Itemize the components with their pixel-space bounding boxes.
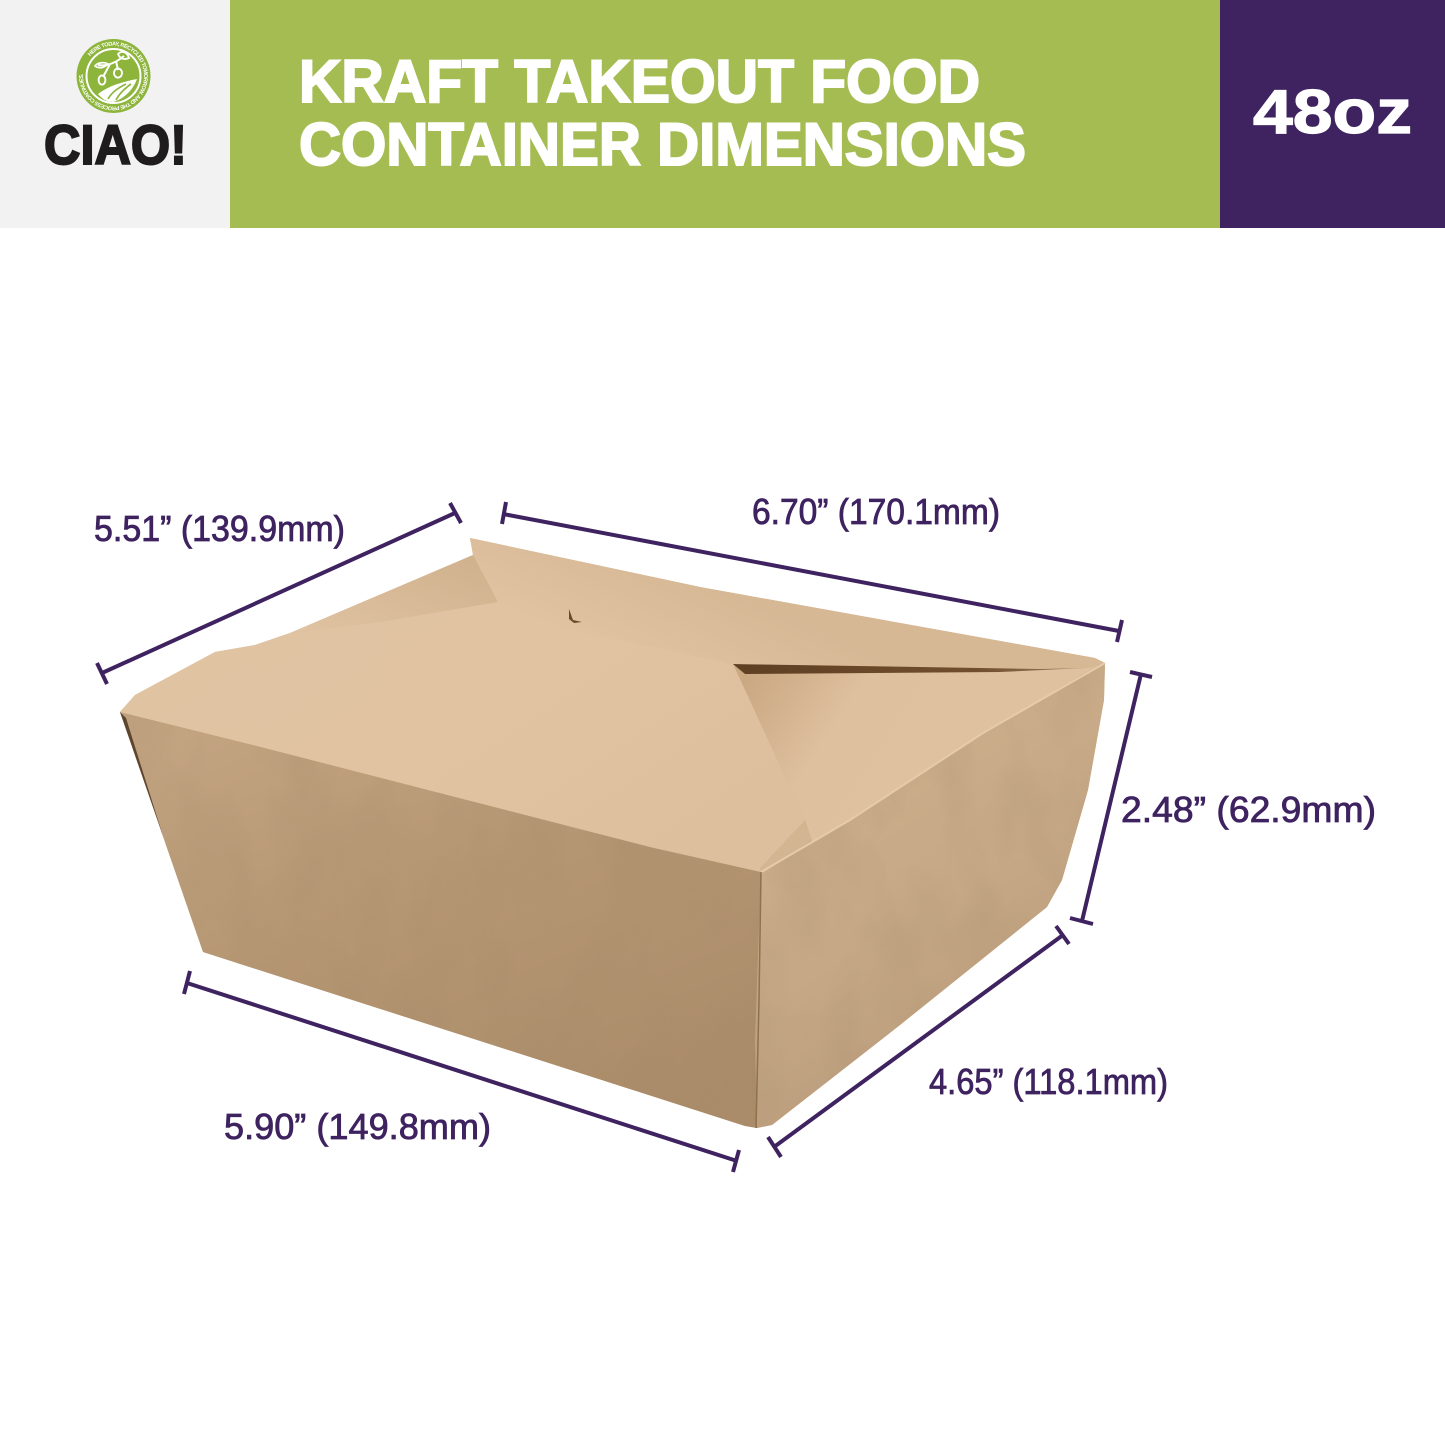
box: front face	[120, 712, 762, 1128]
capacity label: 48oz	[1253, 78, 1412, 147]
dimension: depth top	[94, 503, 461, 684]
icon: green circular logo badge: HERE TODAY, RECYCLED TOMORROW. AND THE PROCESS CONTINUES.	[79, 42, 148, 110]
header panel: logo	[0, 0, 230, 228]
dimension: height	[1070, 672, 1376, 924]
box: vertical corner line	[756, 872, 761, 1128]
bottom length measure line	[184, 971, 739, 1172]
kraft container box	[120, 538, 1110, 1130]
box: left dark edge	[120, 712, 163, 836]
box: inner fold panel	[733, 664, 1100, 842]
box: slit shadow	[733, 664, 1085, 674]
box: mottled paper texture	[120, 660, 1110, 1130]
box: back notch	[290, 555, 498, 633]
box: top back flap	[470, 538, 1105, 669]
height measure line	[1070, 672, 1152, 924]
box: silhouette base	[120, 538, 1105, 1128]
title: CONTAINER DIMENSIONS	[299, 111, 1026, 178]
bottom width measure line	[768, 926, 1069, 1157]
box: front corner crease	[760, 820, 812, 874]
height label: 2.48” (62.9mm)	[1121, 789, 1376, 830]
box: lid tab slot	[569, 609, 582, 623]
bottom length label: 5.90” (149.8mm)	[224, 1106, 491, 1147]
dimension: bottom length	[184, 971, 739, 1172]
top length label: 6.70” (170.1mm)	[752, 491, 1000, 532]
header panel: capacity	[1220, 0, 1445, 228]
title	[299, 48, 1026, 178]
title: KRAFT TAKEOUT FOOD	[299, 48, 980, 115]
dimension: bottom width	[768, 926, 1168, 1157]
depth measure line	[97, 503, 461, 684]
top length measure line	[502, 502, 1122, 642]
dimension: top length	[502, 491, 1122, 642]
logo wordmark: CIAO!	[44, 113, 187, 176]
box: main lid flap	[120, 602, 805, 872]
box: right face	[755, 663, 1105, 1128]
bottom width label: 4.65” (118.1mm)	[929, 1061, 1168, 1102]
depth label: 5.51” (139.9mm)	[94, 508, 345, 549]
box: highlight crease	[761, 663, 1105, 872]
header panel: title	[230, 0, 1220, 228]
